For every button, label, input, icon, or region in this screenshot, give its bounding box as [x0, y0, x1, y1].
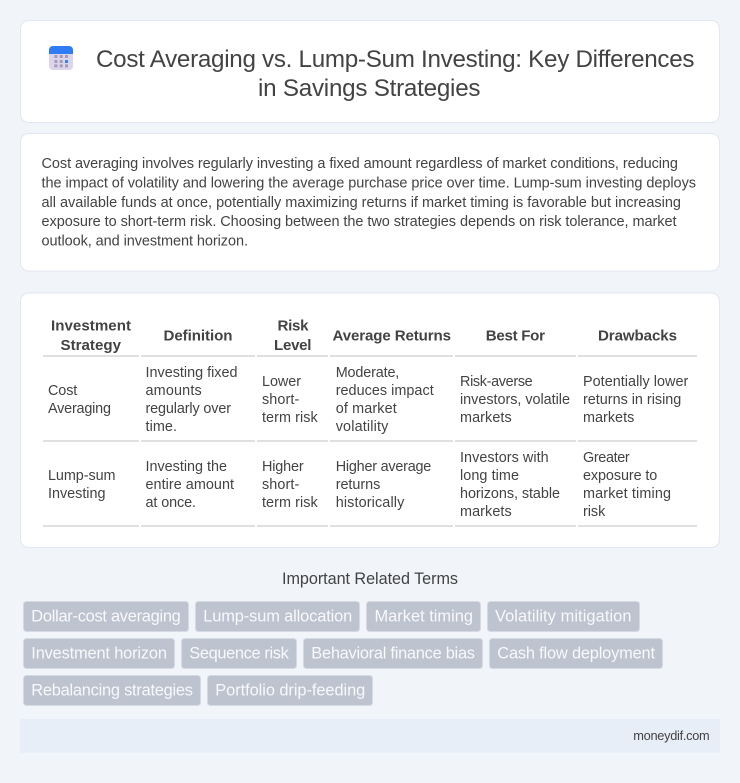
- table row: cost averaging: amounts: [146, 383, 202, 399]
- table header row: Strategy: [60, 337, 122, 354]
- table row: cost averaging: time.: [146, 419, 177, 435]
- table row: cost averaging: of market: [336, 401, 397, 417]
- table row: cost averaging: short-: [262, 392, 300, 408]
- panel: related term tags: Behavioral finance bias: [311, 645, 475, 663]
- table row: lump-sum investing: horizons, stable: [460, 486, 560, 502]
- table row: cost averaging: Averaging: [48, 401, 111, 417]
- footer: [20, 719, 720, 753]
- panel: title header: [20, 20, 720, 122]
- table row: lump-sum investing: Higher average: [336, 459, 431, 475]
- panel: related term tags: Sequence risk: [189, 645, 290, 663]
- table row: lump-sum investing: Investors with: [460, 450, 549, 466]
- table row: cost averaging: Investing fixed: [146, 365, 238, 381]
- table row: lump-sum investing: short-: [262, 477, 300, 493]
- table header row: Drawbacks: [598, 328, 677, 344]
- icon: calendar: [49, 46, 73, 70]
- footer: moneydif.com: [633, 728, 710, 743]
- panel: related term tags: [24, 602, 662, 706]
- panel: related term tags: Dollar-cost averaging: [31, 608, 181, 626]
- text block: summary paragraph: the impact of volatility and lowering the average purchase price over time. Lump-sum investing deploys: [42, 176, 696, 192]
- table row: lump-sum investing: Investing the: [146, 459, 227, 475]
- table row: lump-sum investing: markets: [460, 504, 512, 520]
- panel: summary: [20, 134, 720, 271]
- table row: cost averaging: term risk: [262, 410, 318, 426]
- table row: lump-sum investing: exposure to: [583, 468, 657, 484]
- table row: cost averaging: volatility: [336, 419, 389, 435]
- panel: related term tags: Volatility mitigation: [495, 608, 632, 626]
- panel: comparison table: [20, 293, 720, 548]
- table header row: [51, 318, 677, 354]
- table row: cost averaging: [48, 365, 689, 435]
- table row: cost averaging: reduces impact: [336, 383, 434, 399]
- heading: related terms: Important Related Terms: [282, 570, 458, 588]
- panel: related term tags: Investment horizon: [31, 645, 167, 663]
- table row: cost averaging: markets: [460, 410, 512, 426]
- table header row: Definition: [164, 328, 232, 344]
- table row: cost averaging: Risk-averse: [460, 374, 533, 390]
- table row: lump-sum investing: Lump-sum: [48, 468, 116, 484]
- panel: related term tags: Market timing: [374, 608, 473, 626]
- table row: cost averaging: regularly over: [146, 401, 231, 417]
- title: in Savings Strategies: [258, 75, 480, 102]
- table row: lump-sum investing: term risk: [262, 495, 318, 511]
- table row: lump-sum investing: historically: [336, 495, 405, 511]
- text block: summary paragraph: Cost averaging involves regularly investing a fixed amount regardless of market conditions, reducing: [42, 156, 678, 172]
- table row: lump-sum investing: risk: [583, 504, 606, 520]
- table row: lump-sum investing: long time: [460, 468, 519, 484]
- panel: related term tags: Lump-sum allocation: [203, 608, 352, 626]
- table header row: Investment: [51, 318, 131, 334]
- table row: lump-sum investing: Higher: [262, 459, 304, 475]
- table row: cost averaging: Cost: [48, 383, 77, 399]
- table header row: Level: [274, 337, 312, 354]
- table row: cost averaging: Lower: [262, 374, 301, 390]
- title: Cost Averaging vs. Lump-Sum Investing: Key Differences: [96, 46, 694, 73]
- table row: lump-sum investing: [48, 450, 671, 520]
- text block: summary paragraph: outlook, and investment horizon.: [42, 234, 248, 250]
- title: [96, 46, 694, 102]
- table row: cost averaging: Moderate,: [336, 365, 399, 381]
- table row: lump-sum investing: Investing: [48, 486, 106, 502]
- text block: summary paragraph: all available funds at once, potentially maximizing returns if market timing is favorable but increasing: [42, 195, 681, 211]
- table row: lump-sum investing: entire amount: [146, 477, 234, 493]
- table header row: Risk: [278, 318, 309, 334]
- text block: summary paragraph: [42, 156, 696, 250]
- table row: lump-sum investing: market timing: [583, 486, 671, 502]
- table row: cost averaging: markets: [583, 410, 634, 426]
- table header row: Best For: [486, 328, 545, 344]
- panel: related term tags: Portfolio drip-feeding: [215, 682, 365, 700]
- table row: cost averaging: returns in rising: [583, 392, 681, 408]
- table header row: Average Returns: [332, 328, 451, 344]
- panel: related term tags: Rebalancing strategies: [31, 682, 193, 700]
- table row: cost averaging: Potentially lower: [583, 374, 689, 390]
- text block: summary paragraph: exposure to short-term risk. Choosing between the two strategies depends on risk tolerance, market: [42, 214, 676, 230]
- table row: cost averaging: investors, volatile: [460, 392, 570, 408]
- table row: lump-sum investing: at once.: [146, 495, 196, 511]
- table row: lump-sum investing: Greater: [583, 450, 630, 466]
- panel: related term tags: Cash flow deployment: [497, 645, 655, 663]
- table row: lump-sum investing: returns: [336, 477, 380, 493]
